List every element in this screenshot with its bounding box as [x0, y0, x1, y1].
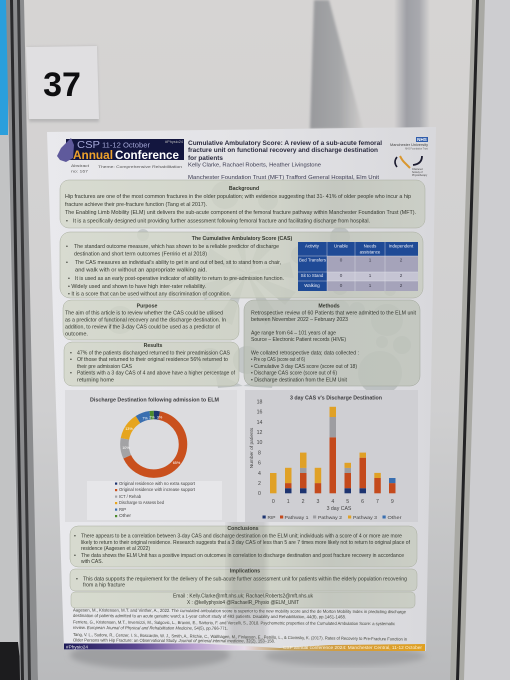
x axis labels: 1 [287, 499, 290, 505]
CAS scoring table: 0 [340, 283, 343, 288]
CAS scoring table: 2 [400, 258, 403, 262]
CAS bullet list: It is used as an early post-operative indicator of ability to return to pre-admission function. [75, 276, 284, 282]
results bullet list: their pre admission CAS [77, 364, 132, 370]
references [73, 608, 408, 644]
implications text: This data supports the requirement for the delivery of the sub-acute further assessment unit for patients within the elderly population recovering [83, 576, 407, 582]
CAS scoring table: Unable [334, 244, 349, 248]
results bullet list: Of those that returned to their original residence 56% returned to [77, 357, 228, 363]
methods text: Retrospective review of 60 Patients that were admitted to the ELM unit [251, 310, 417, 316]
conclusions bullet list: • [74, 534, 76, 540]
bar chart legend [262, 515, 402, 520]
CAS bullet list: and walk with or without an appropriate walking aid. [75, 268, 207, 274]
results bullet list: • [70, 370, 72, 376]
results bullet list: • [70, 350, 72, 356]
poster title [188, 140, 382, 162]
CAS bullet list: • [68, 276, 70, 282]
affiliation: Manchester Foundation Trust (MFT) Trafford General Hospital, Elm Unit [188, 175, 379, 181]
results bullet list: returning home [77, 378, 114, 384]
abstract number and theme: no: 167 [71, 168, 89, 174]
panel: methods [244, 300, 420, 386]
implications text: • [76, 576, 78, 582]
bar chart legend: Other [388, 515, 402, 520]
logo: Chartered Society: Chartered [412, 168, 423, 171]
implications text [76, 576, 407, 588]
donut legend: RIP [119, 507, 126, 512]
logo: Chartered Society: Physiotherapy [412, 174, 428, 177]
donut legend: Original residence with no extra support [119, 481, 196, 486]
panel: results [64, 342, 239, 386]
bar chart legend: RIP [268, 515, 276, 520]
conclusions bullet list: There appears to be a correlation between 3-day CAS and discharge destination on the ELM unit; individuals with a score of 4 or more are more [81, 534, 402, 540]
y axis labels: 4 [258, 471, 261, 477]
y axis labels: 0 [258, 491, 261, 497]
donut percentage labels: 13% [125, 427, 133, 431]
purpose text: The aim of this article is to review whether the CAS could be utilised [65, 310, 223, 316]
CAS scoring table: Needs [364, 244, 377, 248]
results bullet list: Patients with a 3 day CAS of 4 and above have a higher percentage of [77, 370, 235, 376]
CAS bullet list [66, 244, 284, 298]
heading: conclusions: Conclusions [227, 526, 259, 532]
poster title: Cumulative Ambulatory Score: A review of a sub-acute femoral [188, 140, 382, 147]
y axis labels: 10 [257, 440, 262, 446]
conference logo box: 11-12 October [102, 142, 151, 150]
x axis labels: 6 [361, 499, 364, 505]
conference logo box: CSP [77, 140, 100, 151]
methods text: • Discharge CAS score (score out of 6) [251, 370, 337, 376]
y axis labels [249, 400, 262, 497]
x axis labels: 0 [272, 499, 275, 505]
purpose text: addition, to review if the 3-day CAS could be used as a predictor of [65, 324, 221, 330]
panel: implications [70, 568, 417, 591]
methods text: Source – Electronic Patient records (HIVE) [251, 337, 346, 343]
CAS bullet list: The CAS measures an individual's ability to get in and out of bed, sit to stand from a chair, [75, 260, 281, 266]
abstract number and theme: Theme: Comprehensive Rehabilitation [98, 164, 182, 169]
donut legend: Original residence with increase support [119, 487, 196, 492]
donut percentage labels: 10% [122, 446, 130, 450]
methods text: We collated retrospective data; data collected : [251, 350, 359, 356]
logo: NHS and university: NHS Foundation Trust [405, 146, 428, 150]
abstract number and theme [71, 163, 182, 174]
CAS scoring table: Walking [304, 283, 320, 288]
x axis labels: 5 [346, 499, 349, 505]
CAS scoring table: Bed Transfers [299, 258, 327, 262]
number card 37: 37 [43, 66, 81, 104]
donut percentage labels: 7% [142, 416, 148, 420]
conference logo box: Conference [115, 150, 179, 162]
panel: contact details: X : @kellyphysio4 @RachaelR_Physio @ELM_UNIT [187, 600, 300, 606]
y axis labels: 16 [257, 410, 262, 416]
donut chart [124, 415, 183, 474]
background text: It is a specifically designed unit providing further assessment following femoral fracture and facilitating discharge from hospital. [73, 218, 370, 224]
panel: conclusions [70, 526, 417, 567]
conclusions bullet list: likely to return to their original residence. Research suggests that a 3 day CAS of less than 5 are 7 times more likely not to return to original place of [81, 540, 410, 546]
header: conference banner [57, 137, 428, 181]
donut percentage labels [122, 416, 181, 465]
conference logo box [57, 138, 184, 162]
y axis labels: 14 [257, 420, 262, 426]
footer bar: #Physio24 [66, 644, 88, 650]
purpose text: as a predictor of functional recovery and the discharge destination. In [65, 318, 226, 324]
conference logo box: Annual [73, 150, 113, 162]
donut legend [87, 481, 222, 520]
heading: methods: Methods [318, 304, 340, 310]
results bullet list [70, 350, 235, 384]
methods text: • Pre op CAS (score out of 6) [251, 357, 305, 363]
logo: NHS and university [390, 137, 428, 150]
panel: discharge destination donut chart [65, 390, 237, 522]
y axis labels: 2 [258, 481, 261, 487]
CAS scoring table: assistance [360, 250, 381, 254]
y axis labels: 6 [258, 461, 261, 467]
methods text: Age range from 64 – 101 years of age [251, 330, 336, 336]
panel: background [60, 180, 425, 228]
heading: CAS: The Cumulative Ambulatory Score (CAS) [192, 236, 292, 242]
results bullet list: 47% of the patients discharged returned to their preadmission CAS [77, 350, 230, 356]
CAS scoring table: 0 [340, 258, 343, 262]
x axis labels: 7 [376, 499, 379, 505]
bar chart legend: Pathway 1 [284, 515, 309, 520]
logo: Chartered Society [395, 156, 428, 177]
CAS bullet list: • [66, 244, 68, 250]
conclusions bullet list: with CAS. [81, 559, 103, 565]
conclusions bullet list: • [74, 553, 76, 559]
chart title: 3 day CAS: 3 day CAS v's Discharge Destination [290, 396, 382, 402]
panel: 3 day CAS bar chart [245, 390, 418, 522]
donut percentage labels: 3% [157, 416, 163, 420]
references: review. European Journal of Physical and Rehabilitation Medicine, 54(5), pp.766-771. [73, 625, 228, 631]
x axis labels: 3 day CAS [327, 506, 352, 512]
background text: Hip fractures are one of the most common fractures in the older population; with evidence suggesting that 31- 41% of older people who incur a hip [65, 194, 411, 200]
poster title: fracture unit on functional recovery and discharge destination [188, 147, 378, 154]
y axis labels: Number of patients [249, 427, 255, 468]
methods text [251, 310, 417, 384]
panel: contact details: Email : Kelly.Clarke@mft.nhs.uk; Rachael.Roberts2@mft.nhs.uk [173, 594, 313, 600]
conclusions bullet list [74, 534, 410, 565]
CAS bullet list: destination and short term outcomes (Ferririo et al 2018) [74, 252, 207, 258]
donut percentage labels: 2% [149, 416, 155, 420]
x axis labels: 9 [391, 499, 394, 505]
CAS bullet list: • It is a score that can be used without any discrimination of cognition. [68, 292, 231, 298]
heading: results: Results [144, 343, 162, 349]
heading: purpose: Purpose [137, 304, 157, 310]
methods text: • Cumulative 3 day CAS score (score out of 18) [251, 364, 357, 370]
methods text: between November 2022 – February 2023 [251, 317, 348, 323]
background text [65, 194, 416, 224]
logo: Chartered Society: Society of [412, 171, 423, 174]
x axis labels [272, 499, 394, 512]
CAS scoring table: 2 [400, 273, 403, 278]
footer bar: CSP annual conference 2024: Manchester Central, 11-12 October [283, 645, 422, 650]
donut legend: Other [119, 513, 132, 518]
conclusions bullet list: residence (Aagesen et al 2022) [81, 546, 150, 552]
logo: NHS and university: Manchester University [390, 143, 428, 147]
purpose text [65, 310, 226, 338]
logo: NHS and university: NHS [417, 137, 427, 142]
donut percentage labels: 65% [173, 461, 181, 465]
results bullet list: • [70, 357, 72, 363]
implications text: from a hip fracture [83, 582, 125, 588]
conclusions bullet list: The data shows the ELM Unit has a positive impact on outcomes in correlation to discharge destination and post fracture recovery in accordance [81, 553, 404, 559]
chart title: discharge destination: Discharge Destination following admission to ELM [90, 398, 219, 404]
references: Aagesen, M., Kristensen, M.T. and Vinther, A., 2022. The cumulated ambulation score is superior to the new mobility score and the de Morton Mobility Index in predicting discharge [73, 608, 407, 614]
CAS scoring table: 0 [340, 273, 343, 278]
methods text: • Discharge destination from the ELM Unit [251, 378, 348, 384]
y axis labels: 18 [257, 400, 262, 406]
y axis labels: 8 [258, 450, 261, 456]
bar chart legend: Pathway 3 [353, 515, 377, 520]
poster title: for patients [188, 155, 224, 162]
poster sheet [47, 127, 436, 651]
stacked bars [270, 407, 396, 493]
CAS scoring table [298, 242, 418, 291]
x axis labels: 2 [302, 499, 305, 505]
CAS scoring table: Activity [305, 244, 320, 248]
heading: background: Background [229, 186, 259, 192]
panel: cumulative ambulatory score [60, 232, 423, 298]
CAS bullet list: • [66, 260, 68, 266]
CAS scoring table: Sit to Stand [301, 273, 324, 278]
references: Tang, V. L., Sudore, R., Cenzer, I. S., Boscardin, W. J., Smith, A., Ritchie, C., Wallhagen, M., Finlayson, E., Petrillo, L., & Covinsky, K. (2017). Rates of Recovery to Pre-Fracture Function in [73, 632, 408, 642]
references: destination of patients admitted to an acute geriatric ward; a 1-year cohort study of 493 patients. Disability and Rehabilitation, 44(8), pp.1461-1468. [73, 613, 346, 619]
background text: • [66, 218, 68, 224]
references: Older Persons with Hip Fracture: an Observational Study. Journal of general internal medicine, 32(2), 153–158. [73, 638, 275, 644]
CAS scoring table: 1 [369, 258, 372, 262]
CAS scoring table: 1 [369, 273, 372, 278]
CAS scoring table: 2 [400, 283, 403, 288]
number card 37 [26, 46, 99, 122]
CAS scoring table: Independent [389, 244, 414, 248]
authors: Kelly Clarke, Rachael Roberts, Heather Livingstone [188, 162, 321, 168]
conference logo box: #Physio24 [165, 140, 183, 144]
abstract number and theme: Abstract [71, 163, 90, 168]
panel: purpose [63, 300, 239, 340]
x axis labels: 4 [331, 499, 334, 505]
panel: contact details [71, 592, 415, 608]
purpose text: outcome. [65, 332, 88, 338]
donut legend: ICT / Rehab [119, 494, 142, 499]
CAS bullet list: • Widely used and shown to have high inter-rater reliability. [68, 284, 206, 290]
CAS scoring table: 1 [369, 283, 372, 288]
y axis labels: 12 [257, 430, 262, 436]
background text: fracture achieve their pre-fracture function (Tang et al 2017). [65, 202, 207, 208]
x axis labels: 3 [317, 499, 320, 505]
footer bar [64, 644, 425, 651]
donut legend: Discharge to Assess bed [119, 500, 165, 505]
bar chart legend: Pathway 2 [318, 515, 342, 520]
references: Ferriero, G., Kristensen, M.T., Invernizzi, M., Salgovic, L., Bravini, E., Sartorio, F. and Vercelli, S., 2018. Psychometric properties of the Cumulated Ambulation Score: a systematic [73, 620, 396, 626]
CAS bullet list: The standard outcome measure, which has shown to be a reliable predictor of discharge [74, 244, 279, 250]
heading: implications: Implications [230, 568, 260, 574]
background text: The Enabling Limb Mobility (ELM) unit delivers the sub-acute component of the femoral fracture pathway within Manchester Foundation Trust (MFT). [65, 210, 416, 216]
